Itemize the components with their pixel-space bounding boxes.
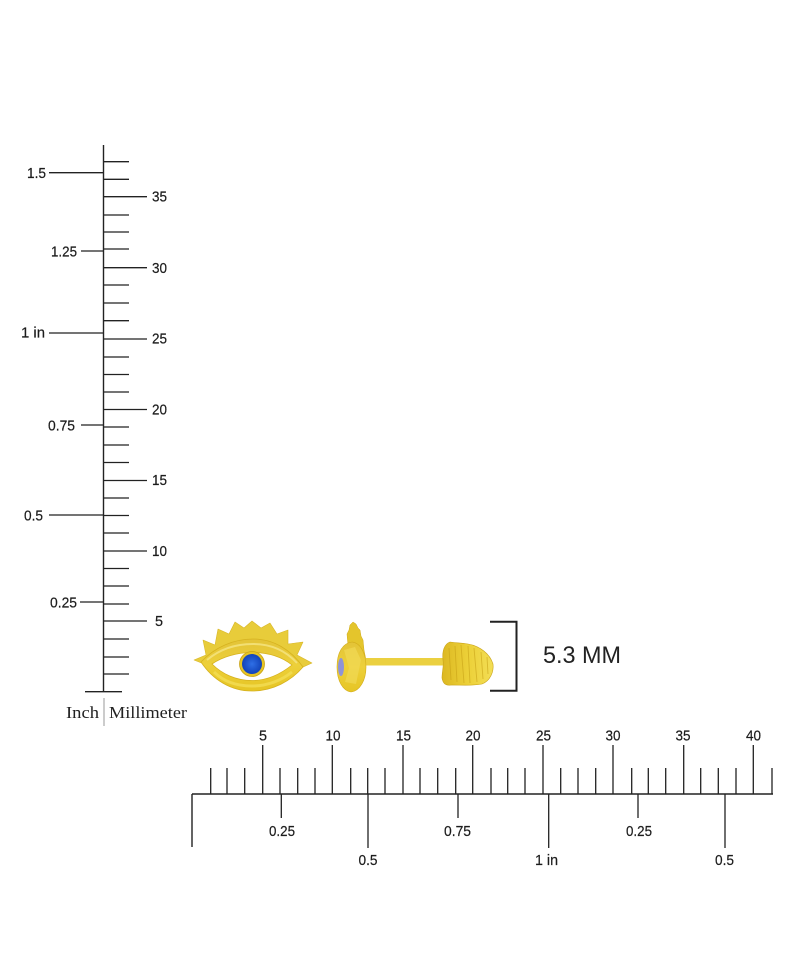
inch labels: 0.5 <box>358 852 378 869</box>
inch ticks <box>49 173 104 602</box>
unit caption: Millimeter <box>109 703 187 722</box>
millimeter labels: 15 <box>396 728 411 744</box>
eye upper highlight <box>207 644 297 663</box>
millimeter labels: 10 <box>152 543 167 560</box>
gem bezel <box>240 652 264 676</box>
millimeter labels: 30 <box>152 260 167 277</box>
millimeter labels: 30 <box>606 728 620 744</box>
size bracket <box>490 622 516 691</box>
millimeter labels <box>152 188 167 630</box>
screw back grooves <box>449 645 488 683</box>
eye outline <box>201 639 303 691</box>
unit caption <box>66 698 187 726</box>
earring post <box>362 658 444 666</box>
inch labels <box>269 823 734 869</box>
horizontal ruler axis <box>192 794 773 847</box>
side body <box>337 642 366 692</box>
inch labels: 0.5 <box>715 852 734 869</box>
millimeter labels: 5 <box>155 613 163 630</box>
icon: eye earring front view <box>194 621 312 691</box>
side gem <box>338 658 344 676</box>
inch labels: 1 in <box>21 324 45 342</box>
inch labels: 0.75 <box>444 823 471 840</box>
millimeter labels: 20 <box>466 728 480 744</box>
size label: 5.3 MM <box>543 642 621 669</box>
millimeter labels <box>259 728 761 744</box>
millimeter labels: 25 <box>152 330 167 348</box>
millimeter ticks <box>211 745 772 794</box>
millimeter labels: 10 <box>326 728 340 744</box>
vertical ruler axis and base <box>85 145 122 692</box>
inch labels: 1.5 <box>27 165 46 182</box>
inch labels: 1.25 <box>51 244 77 260</box>
millimeter labels: 35 <box>152 188 167 206</box>
millimeter labels: 40 <box>746 728 761 744</box>
inch labels: 0.25 <box>269 823 295 840</box>
inch labels: 1 in <box>535 852 558 869</box>
horizontal ruler <box>192 728 773 869</box>
side body facet <box>344 647 361 684</box>
vertical ruler <box>21 145 187 726</box>
millimeter labels: 35 <box>676 728 690 744</box>
inch labels: 0.25 <box>50 594 77 612</box>
inch labels: 0.75 <box>48 418 75 434</box>
millimeter labels: 20 <box>152 402 167 418</box>
inch labels: 0.5 <box>24 508 43 524</box>
unit caption: Inch <box>66 703 100 722</box>
side lashes <box>347 622 366 660</box>
screw back <box>442 642 493 685</box>
inch ticks <box>281 794 725 848</box>
millimeter labels: 15 <box>152 472 167 489</box>
eye lower highlight <box>214 672 292 686</box>
eyelashes <box>194 621 312 668</box>
inch labels: 0.25 <box>626 823 652 840</box>
icon: earring side view <box>337 622 493 692</box>
millimeter labels: 5 <box>259 728 267 744</box>
millimeter labels: 25 <box>536 728 551 744</box>
blue gem <box>242 654 262 674</box>
millimeter ticks <box>104 162 147 674</box>
inch labels <box>21 165 77 612</box>
